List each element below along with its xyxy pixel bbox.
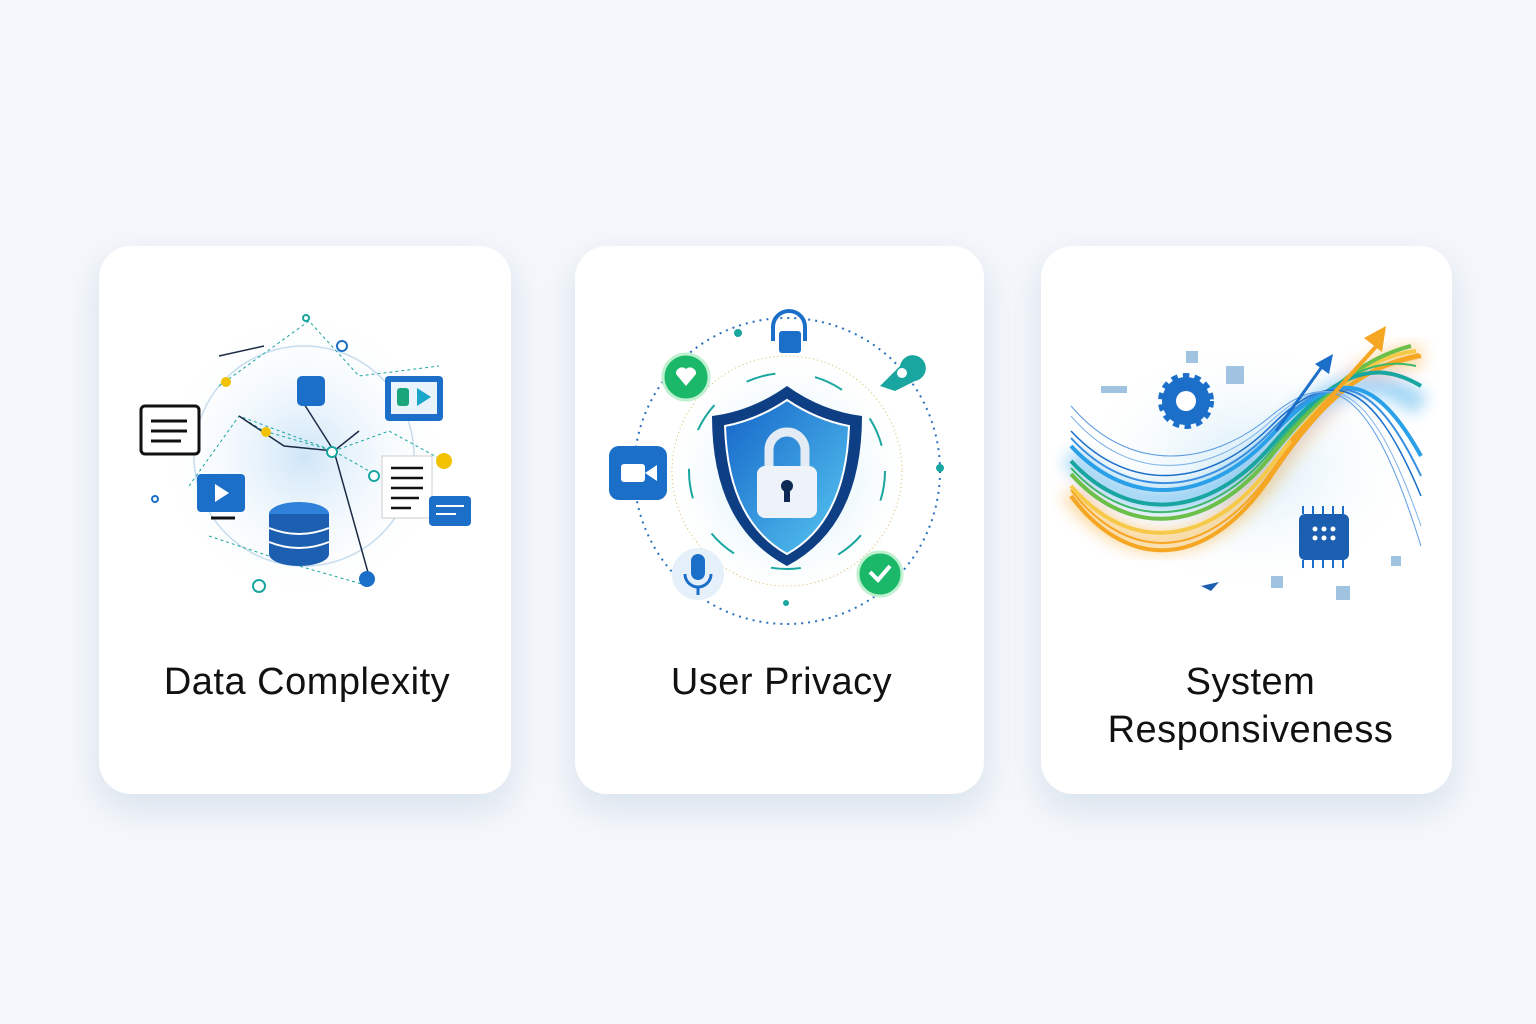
illustration: data network (140, 314, 471, 593)
icon: shield (712, 386, 862, 566)
card: user privacy (575, 246, 984, 794)
icon: document monitor (141, 406, 199, 454)
icon: list document (382, 456, 432, 518)
icon: heart bubble (663, 354, 709, 400)
icon: gear (1162, 377, 1210, 425)
illustration: shield with lock (609, 309, 944, 625)
icon: bird (858, 552, 902, 596)
icon: bag lock (773, 311, 805, 353)
card: system responsiveness (1041, 246, 1452, 794)
icon: key pin (880, 355, 926, 391)
title: system responsiveness: System (1186, 661, 1315, 703)
title: system responsiveness (1108, 661, 1393, 751)
icon: video (609, 446, 667, 500)
icon: chip (1299, 506, 1349, 568)
title: system responsiveness: Responsiveness (1108, 709, 1393, 751)
icon: chat (429, 496, 471, 526)
icon: cup (297, 376, 325, 406)
title: user privacy: User Privacy (671, 661, 892, 703)
icon: database (269, 502, 329, 566)
card: data complexity (99, 246, 511, 794)
icon: microphone (672, 548, 724, 600)
icon: play monitor (197, 474, 245, 518)
arrow: rising orange (1291, 326, 1386, 441)
illustration: speed waves (1056, 326, 1434, 600)
arrow: rising blue (1276, 354, 1333, 431)
title: data complexity: Data Complexity (164, 661, 450, 703)
icon: video monitor (385, 376, 443, 421)
